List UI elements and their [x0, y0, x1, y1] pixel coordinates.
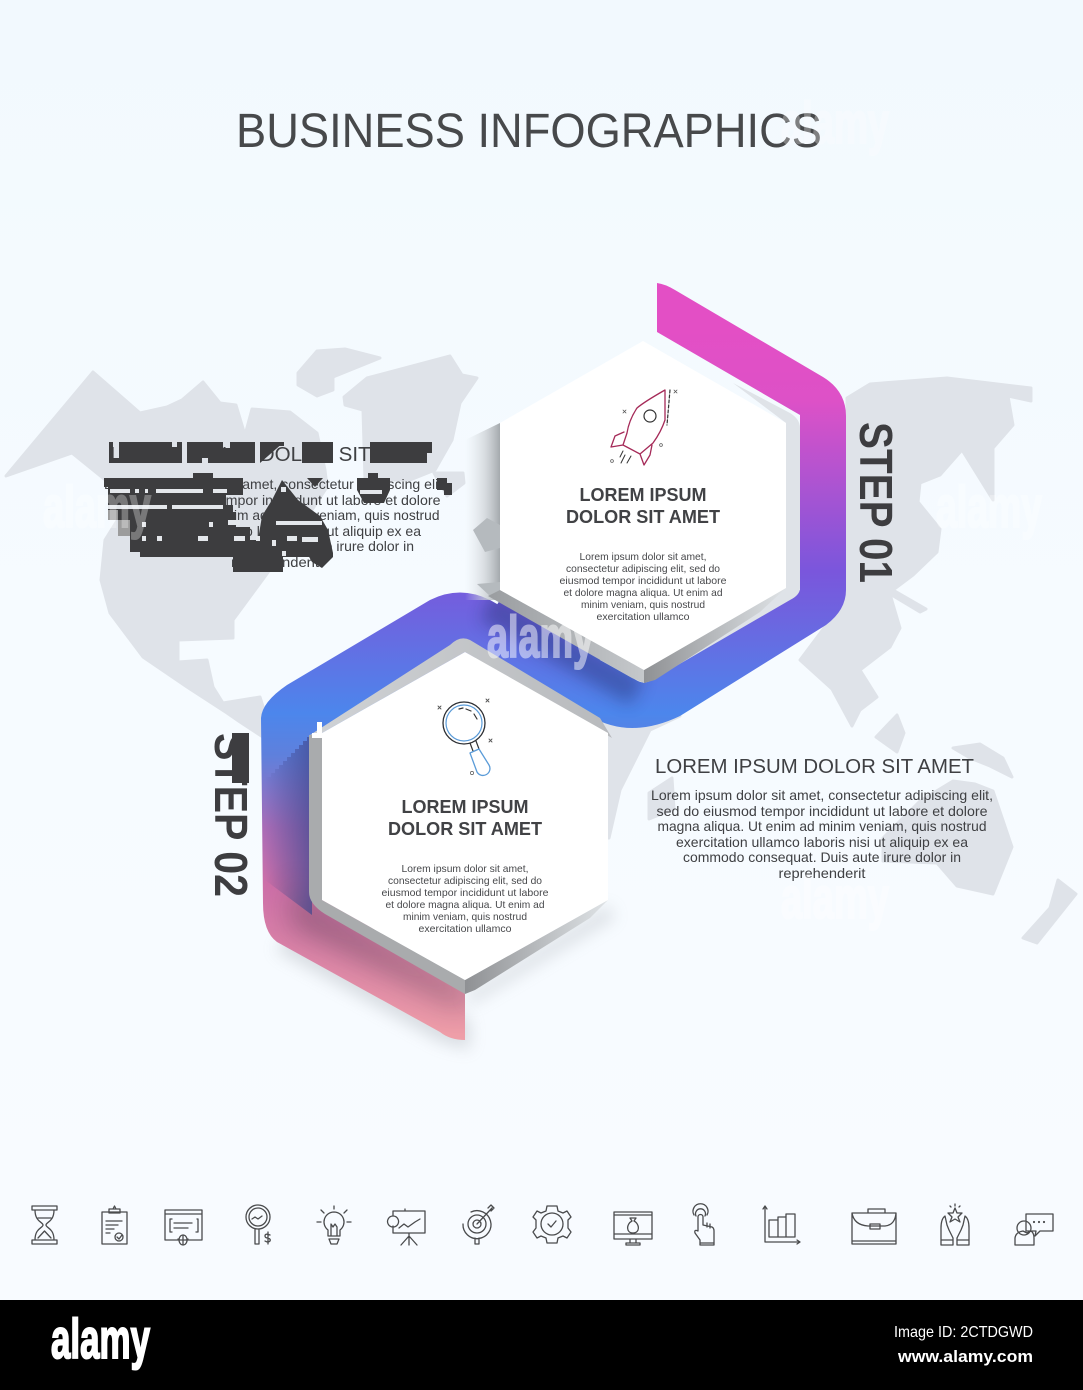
right paragraph: Lorem ipsum dolor sit amet, consectetur adipiscing elit, — [651, 787, 993, 803]
map: north america — [6, 372, 327, 745]
right heading: LOREM IPSUM DOLOR SIT AMET — [655, 756, 974, 778]
shadowed map fragments — [473, 518, 500, 596]
right paragraph: sed do eiusmod tempor incididunt ut labore et dolore — [656, 803, 988, 819]
left paragraph: Lorem ipsum dolor sit amet, consectetur adipiscing elit, — [104, 476, 446, 492]
body text: minim veniam, quis nostrud — [581, 599, 705, 611]
icon: presentation chart — [388, 1209, 425, 1245]
body text: eiusmod tempor incididunt ut labore — [560, 575, 727, 587]
icon: magnifier with dollar — [246, 1205, 270, 1244]
icon: target — [463, 1205, 494, 1244]
body text: Lorem ipsum dolor sit amet, — [402, 863, 528, 875]
body text: et dolore magna aliqua. Ut enim ad — [564, 587, 723, 599]
right text block — [651, 756, 993, 881]
heading — [388, 797, 542, 839]
map: australia — [883, 781, 1012, 894]
right paragraph — [651, 787, 993, 881]
footer url: www.alamy.com — [897, 1347, 1033, 1366]
body text: Lorem ipsum dolor sit amet, — [580, 551, 706, 563]
heading: LOREM IPSUM — [580, 485, 706, 505]
step 02 corrupted top — [232, 733, 249, 783]
ribbon drop shadow — [275, 925, 470, 1050]
corrupted staircase — [312, 722, 322, 738]
body text: consectetur adipiscing elit, sed do — [566, 563, 720, 575]
left paragraph: commodo consequat. Duis aute irure dolor in — [136, 538, 414, 554]
icon: gear — [533, 1206, 571, 1243]
right soft shadow — [465, 905, 615, 1005]
top bevel — [310, 638, 612, 738]
right paragraph: magna aliqua. Ut enim ad minim veniam, quis nostrud — [658, 818, 986, 834]
title: BUSINESS INFOGRAPHICS — [236, 105, 822, 158]
left paragraph: magna aliqua. Ut enim ad minim veniam, quis nostrud — [110, 507, 440, 523]
icon: browser with bug — [165, 1210, 202, 1245]
lower right bevel — [465, 900, 608, 994]
staircase shadow on ribbon — [265, 737, 312, 915]
icon: light bulb — [317, 1206, 351, 1244]
corrupted fragments — [307, 473, 452, 568]
map: asia — [800, 378, 1031, 726]
map: new zealand — [1023, 880, 1076, 943]
step 02 label — [205, 733, 257, 897]
icon: touch hand — [693, 1204, 714, 1245]
watermark: center: alamy — [487, 605, 594, 670]
left text block — [104, 444, 446, 570]
watermarks — [43, 91, 1042, 931]
map: greenland — [344, 356, 477, 480]
corrupted block over left text — [104, 442, 452, 572]
icon: monitor money — [614, 1212, 652, 1245]
ribbon inner shading — [265, 590, 644, 1010]
map: arctic island — [298, 349, 380, 396]
body text: consectetur adipiscing elit, sed do — [388, 875, 542, 887]
icon: rocket — [611, 390, 677, 465]
world map — [6, 349, 1076, 943]
left bevel — [309, 733, 465, 994]
map: east africa — [600, 690, 680, 838]
map: island — [876, 715, 904, 752]
body text: minim veniam, quis nostrud — [403, 911, 527, 923]
lower left bevel — [488, 590, 644, 683]
shadow from lower hexagon on ribbon — [290, 880, 465, 1010]
step 01 label: STEP 01 — [850, 422, 902, 583]
icon: clipboard — [102, 1206, 127, 1244]
left soft shadow — [465, 423, 500, 600]
lower right bevel — [644, 588, 786, 683]
corrupted heading bars — [109, 442, 432, 463]
image id: Image ID: 2CTDGWD — [894, 1324, 1033, 1341]
map: madagascar — [649, 778, 674, 819]
right paragraph: reprehenderit — [778, 865, 866, 881]
left heading: LOREM IPSUM DOLOR SIT AMET — [110, 444, 432, 466]
corrupted paragraph mass — [104, 473, 333, 572]
left paragraph: reprehenderit — [231, 554, 319, 570]
body text: et dolore magna aliqua. Ut enim ad — [386, 899, 545, 911]
heading: DOLOR SIT AMET — [388, 819, 542, 839]
icon: hourglass — [32, 1206, 57, 1244]
footer logo: alamy — [51, 1307, 150, 1370]
icon: hands and star — [941, 1204, 969, 1245]
panel: step 01 hexagon — [465, 341, 800, 683]
watermark: left: alamy — [43, 475, 151, 540]
left paragraph: sed do eiusmod tempor incididunt ut labore et dolore — [110, 492, 441, 508]
panel: step 02 hexagon — [309, 638, 615, 1005]
right paragraph: exercitation ullamco laboris nisi ut aliquip ex ea — [676, 834, 968, 850]
white hexagon — [322, 652, 608, 980]
body text: exercitation ullamco — [596, 611, 690, 623]
step 02 text: STEP 02 — [205, 733, 257, 897]
white hexagon — [500, 341, 786, 670]
body text — [382, 863, 549, 935]
right paragraph: commodo consequat. Duis aute irure dolor in — [683, 849, 961, 865]
icon: clipboard check — [115, 1233, 123, 1241]
corrupted light strips — [108, 487, 382, 556]
icon: bar chart — [763, 1206, 800, 1244]
heading: LOREM IPSUM — [402, 797, 528, 817]
icon: briefcase — [852, 1209, 896, 1244]
heading — [566, 485, 720, 527]
left paragraph — [104, 476, 446, 570]
icon: person with speech bubble — [1015, 1214, 1053, 1245]
gray backing — [600, 383, 800, 682]
ribbon — [261, 283, 846, 1040]
body text: exercitation ullamco — [418, 923, 512, 935]
icon dots — [1033, 1221, 1045, 1223]
corrupted gray fragment — [108, 510, 130, 536]
body text — [560, 551, 727, 623]
map: new guinea arc — [953, 744, 1012, 777]
left paragraph: exercitation ullamco laboris nisi ut aliquip ex ea — [129, 523, 421, 539]
shadow from upper hexagon on ribbon — [480, 590, 644, 705]
body text: eiusmod tempor incididunt ut labore — [382, 887, 549, 899]
footer background — [0, 1300, 1083, 1390]
heading: DOLOR SIT AMET — [566, 507, 720, 527]
icon: magnifier — [438, 699, 492, 775]
map: iceland — [434, 473, 464, 496]
footer bar — [0, 1300, 1083, 1390]
watermark: lower: alamy — [781, 866, 889, 931]
watermark: upper right: alamy — [781, 91, 889, 156]
icon row — [32, 1204, 1053, 1245]
